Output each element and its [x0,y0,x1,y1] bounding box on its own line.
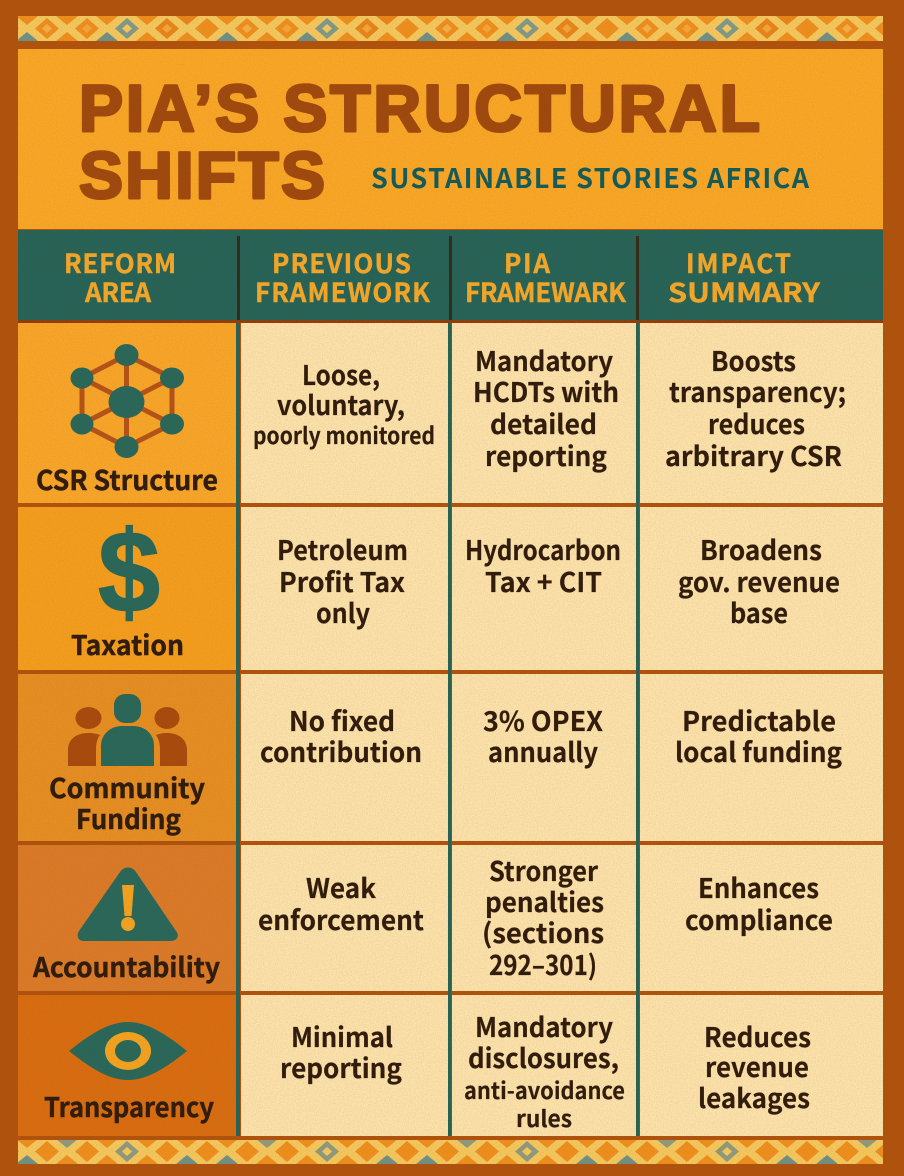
panel: row CSR structure [18,323,883,503]
text: impact transparency: Reduces [704,1016,811,1055]
text: PIA accountability: (sections [482,912,604,951]
title: PIA’S STRUCTURAL [79,71,760,145]
label: Transparency: Transparency [44,1086,214,1125]
title: SHIFTS [79,138,325,212]
text: previous accountability: Weak [306,867,377,906]
text: PIA transparency: rules [516,1100,572,1134]
text: PIA CSR [473,340,619,474]
text: PIA transparency: disclosures, [468,1037,619,1076]
heading: previous framework: FRAMEWORK [255,273,430,310]
text: impact accountability: compliance [685,899,833,938]
text: impact taxation: Broadens [700,529,822,568]
text: previous transparency: Minimal [291,1016,393,1055]
heading: PIA framework: FRAMEWARK [465,273,626,310]
text: PIA accountability: penalties [485,881,604,920]
text: impact CSR: arbitrary CSR [665,435,842,474]
text: previous funding: No fixed [289,700,395,739]
text: impact CSR [665,340,846,474]
panel: row accountability [18,845,883,991]
teal column dividers [236,323,640,1136]
text: impact funding: Predictable [682,700,836,739]
label: Accountability: Accountability [32,946,220,985]
panel: row community funding [18,674,883,841]
text: PIA taxation: Hydrocarbon [465,529,621,568]
text: impact CSR: reduces [708,403,805,442]
text: impact CSR: Boosts [711,340,796,379]
text: previous CSR [253,354,435,451]
text: previous taxation [277,529,408,631]
table frame lines [18,320,883,323]
heading: PIA framework: PIA [504,244,550,281]
text: previous CSR: Loose, [302,354,380,393]
text: PIA funding: 3% OPEX [483,700,603,739]
panel: row transparency [18,995,883,1136]
label: CSR Structure: CSR Structure [36,459,218,498]
label: Community Funding: Funding [76,798,181,837]
heading: reform area: REFORM [64,244,176,281]
text: previous funding [260,700,422,770]
text: previous accountability: enforcement [258,899,424,938]
text: impact funding [675,700,842,770]
text: PIA transparency: anti-avoidance [464,1072,625,1106]
label: Community Funding: Community [49,767,205,806]
text: impact taxation [678,529,840,631]
text: previous taxation: Profit Tax [279,561,405,600]
text: previous transparency [280,1016,402,1086]
text: PIA accountability: 292–301) [489,944,597,983]
text: PIA taxation [465,529,621,600]
text: previous taxation: Petroleum [277,529,408,568]
heading: impact summary: IMPACT [686,244,791,281]
text: PIA transparency [464,1006,625,1134]
text: PIA taxation: Tax + CIT [485,561,602,600]
text: impact taxation: gov. revenue [678,561,840,600]
text: impact transparency: leakages [698,1077,810,1116]
heading: previous framework [255,244,430,310]
text: impact transparency [698,1016,811,1116]
text: previous funding: contribution [260,731,422,770]
heading: impact summary [668,244,821,310]
icon: warning triangle [78,868,178,941]
decorative bottom pattern band [18,1140,883,1164]
label: Taxation: Taxation [71,624,184,663]
text: PIA accountability: Stronger [489,850,598,889]
text: impact CSR: transparency; [669,371,846,410]
text: previous CSR: voluntary, [277,384,405,423]
text: PIA funding: annually [488,731,598,770]
panel: title header [18,49,883,229]
text: impact accountability: Enhances [698,867,819,906]
panel: table header row [18,230,883,320]
text: previous CSR: poorly monitored [253,417,435,451]
decorative top pattern band [18,16,883,41]
text: PIA CSR: Mandatory [475,340,613,379]
subtitle: SUSTAINABLE STORIES AFRICA [371,157,810,196]
label: Community Funding [49,767,205,837]
heading: PIA framework [465,244,626,310]
text: PIA transparency: Mandatory [475,1006,613,1045]
heading: previous framework: PREVIOUS [272,244,411,281]
text: impact taxation: base [730,592,788,631]
text: impact funding: local funding [675,731,842,770]
icon: three people [68,694,187,766]
text: PIA funding [483,700,603,770]
icon: dollar sign: $ [98,507,160,637]
text: PIA accountability [482,850,604,983]
text: PIA CSR: HCDTs with [473,371,619,410]
text: PIA CSR: reporting [485,435,607,474]
title [79,71,760,212]
text: PIA CSR: detailed [490,403,597,442]
icon: network hexagon [70,344,184,458]
heading: reform area: AREA [84,273,151,310]
panel: row taxation [18,507,883,670]
text: impact accountability [685,867,833,938]
text: impact transparency: revenue [705,1046,809,1085]
text: previous accountability [258,867,424,938]
heading: impact summary: SUMMARY [668,273,821,310]
icon: eye [69,1022,187,1080]
heading: reform area [64,244,176,310]
text: previous transparency: reporting [280,1047,402,1086]
text: previous taxation: only [316,592,370,631]
